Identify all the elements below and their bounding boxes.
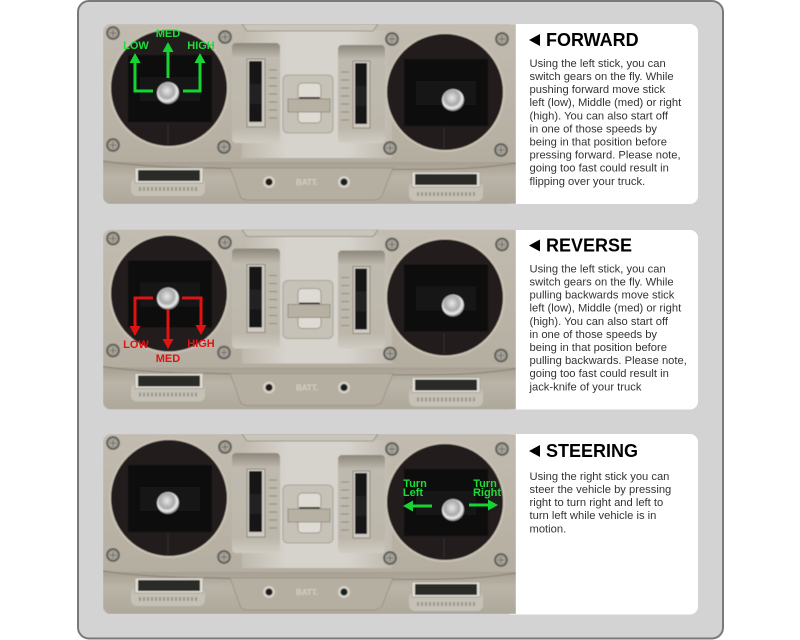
text block: reverse: in one of those speeds by bbox=[530, 329, 657, 341]
text block: forward: being in that position before bbox=[530, 136, 667, 148]
text block: reverse: switch gears on the fly. While bbox=[530, 276, 674, 288]
red gear arrows: low, med, high: MED bbox=[156, 353, 180, 365]
controller photo: reverse bbox=[103, 230, 516, 410]
green gear arrows: low, med, high: MED bbox=[156, 28, 180, 40]
text block: forward: Using the left stick, you can bbox=[530, 58, 666, 70]
text card: steering bbox=[510, 434, 698, 614]
controller photo: steering bbox=[103, 434, 516, 614]
text block: forward: (high). You can also start off bbox=[530, 110, 669, 122]
panel: forward bbox=[103, 24, 698, 204]
text block: forward: going too fast could result in bbox=[530, 162, 669, 174]
text block: steering: turn left while vehicle is in bbox=[530, 510, 656, 522]
heading: forward: FORWARD bbox=[546, 30, 639, 50]
green steering arrows: turn left, turn right: Left bbox=[403, 487, 423, 499]
text block: forward: pressing forward. Please note, bbox=[530, 150, 681, 162]
green gear arrows: low, med, high: HIGH bbox=[187, 40, 215, 52]
green steering arrows: turn left, turn right: Right bbox=[473, 487, 501, 499]
text block: reverse: pulling backwards. Please note, bbox=[530, 355, 687, 367]
text block: reverse: jack-knife of your truck bbox=[528, 382, 642, 394]
green gear arrows: low, med, high bbox=[123, 28, 215, 91]
text block: forward: flipping over your truck. bbox=[530, 176, 645, 188]
text block: reverse: pulling backwards move stick bbox=[530, 290, 675, 302]
text block: forward: in one of those speeds by bbox=[530, 124, 657, 136]
heading: reverse: REVERSE bbox=[546, 236, 632, 256]
text block: steering: right to turn right and left to bbox=[530, 497, 663, 509]
green steering arrows: turn left, turn right: Turn bbox=[473, 478, 497, 490]
red gear arrows: low, med, high: LOW bbox=[123, 339, 149, 351]
heading: steering: STEERING bbox=[546, 441, 638, 461]
text block: steering: Using the right stick you can bbox=[530, 471, 669, 483]
text block: steering: motion. bbox=[530, 524, 566, 536]
text card: reverse bbox=[510, 230, 698, 410]
text block: reverse: (high). You can also start off bbox=[530, 316, 669, 328]
controller photo: forward bbox=[103, 24, 516, 204]
red gear arrows: low, med, high bbox=[123, 298, 215, 365]
text card: forward bbox=[510, 24, 698, 204]
text block: reverse: left (low), Middle (med) or right bbox=[530, 302, 682, 314]
text block: reverse: going too fast could result in bbox=[530, 368, 669, 380]
text block: reverse: being in that position before bbox=[530, 342, 667, 354]
panel: steering bbox=[103, 434, 698, 614]
green steering arrows: turn left, turn right bbox=[403, 478, 501, 512]
text block: steering: steer the vehicle by pressing bbox=[530, 484, 671, 496]
panel: reverse bbox=[103, 230, 698, 410]
green gear arrows: low, med, high: LOW bbox=[123, 40, 149, 52]
text block: reverse: Using the left stick, you can bbox=[530, 264, 666, 276]
text block: forward: left (low), Middle (med) or right bbox=[530, 97, 682, 109]
green steering arrows: turn left, turn right: Turn bbox=[403, 478, 427, 490]
red gear arrows: low, med, high: HIGH bbox=[187, 338, 215, 350]
text block: forward: pushing forward move stick bbox=[530, 84, 665, 96]
text block: forward: switch gears on the fly. While bbox=[530, 71, 674, 83]
